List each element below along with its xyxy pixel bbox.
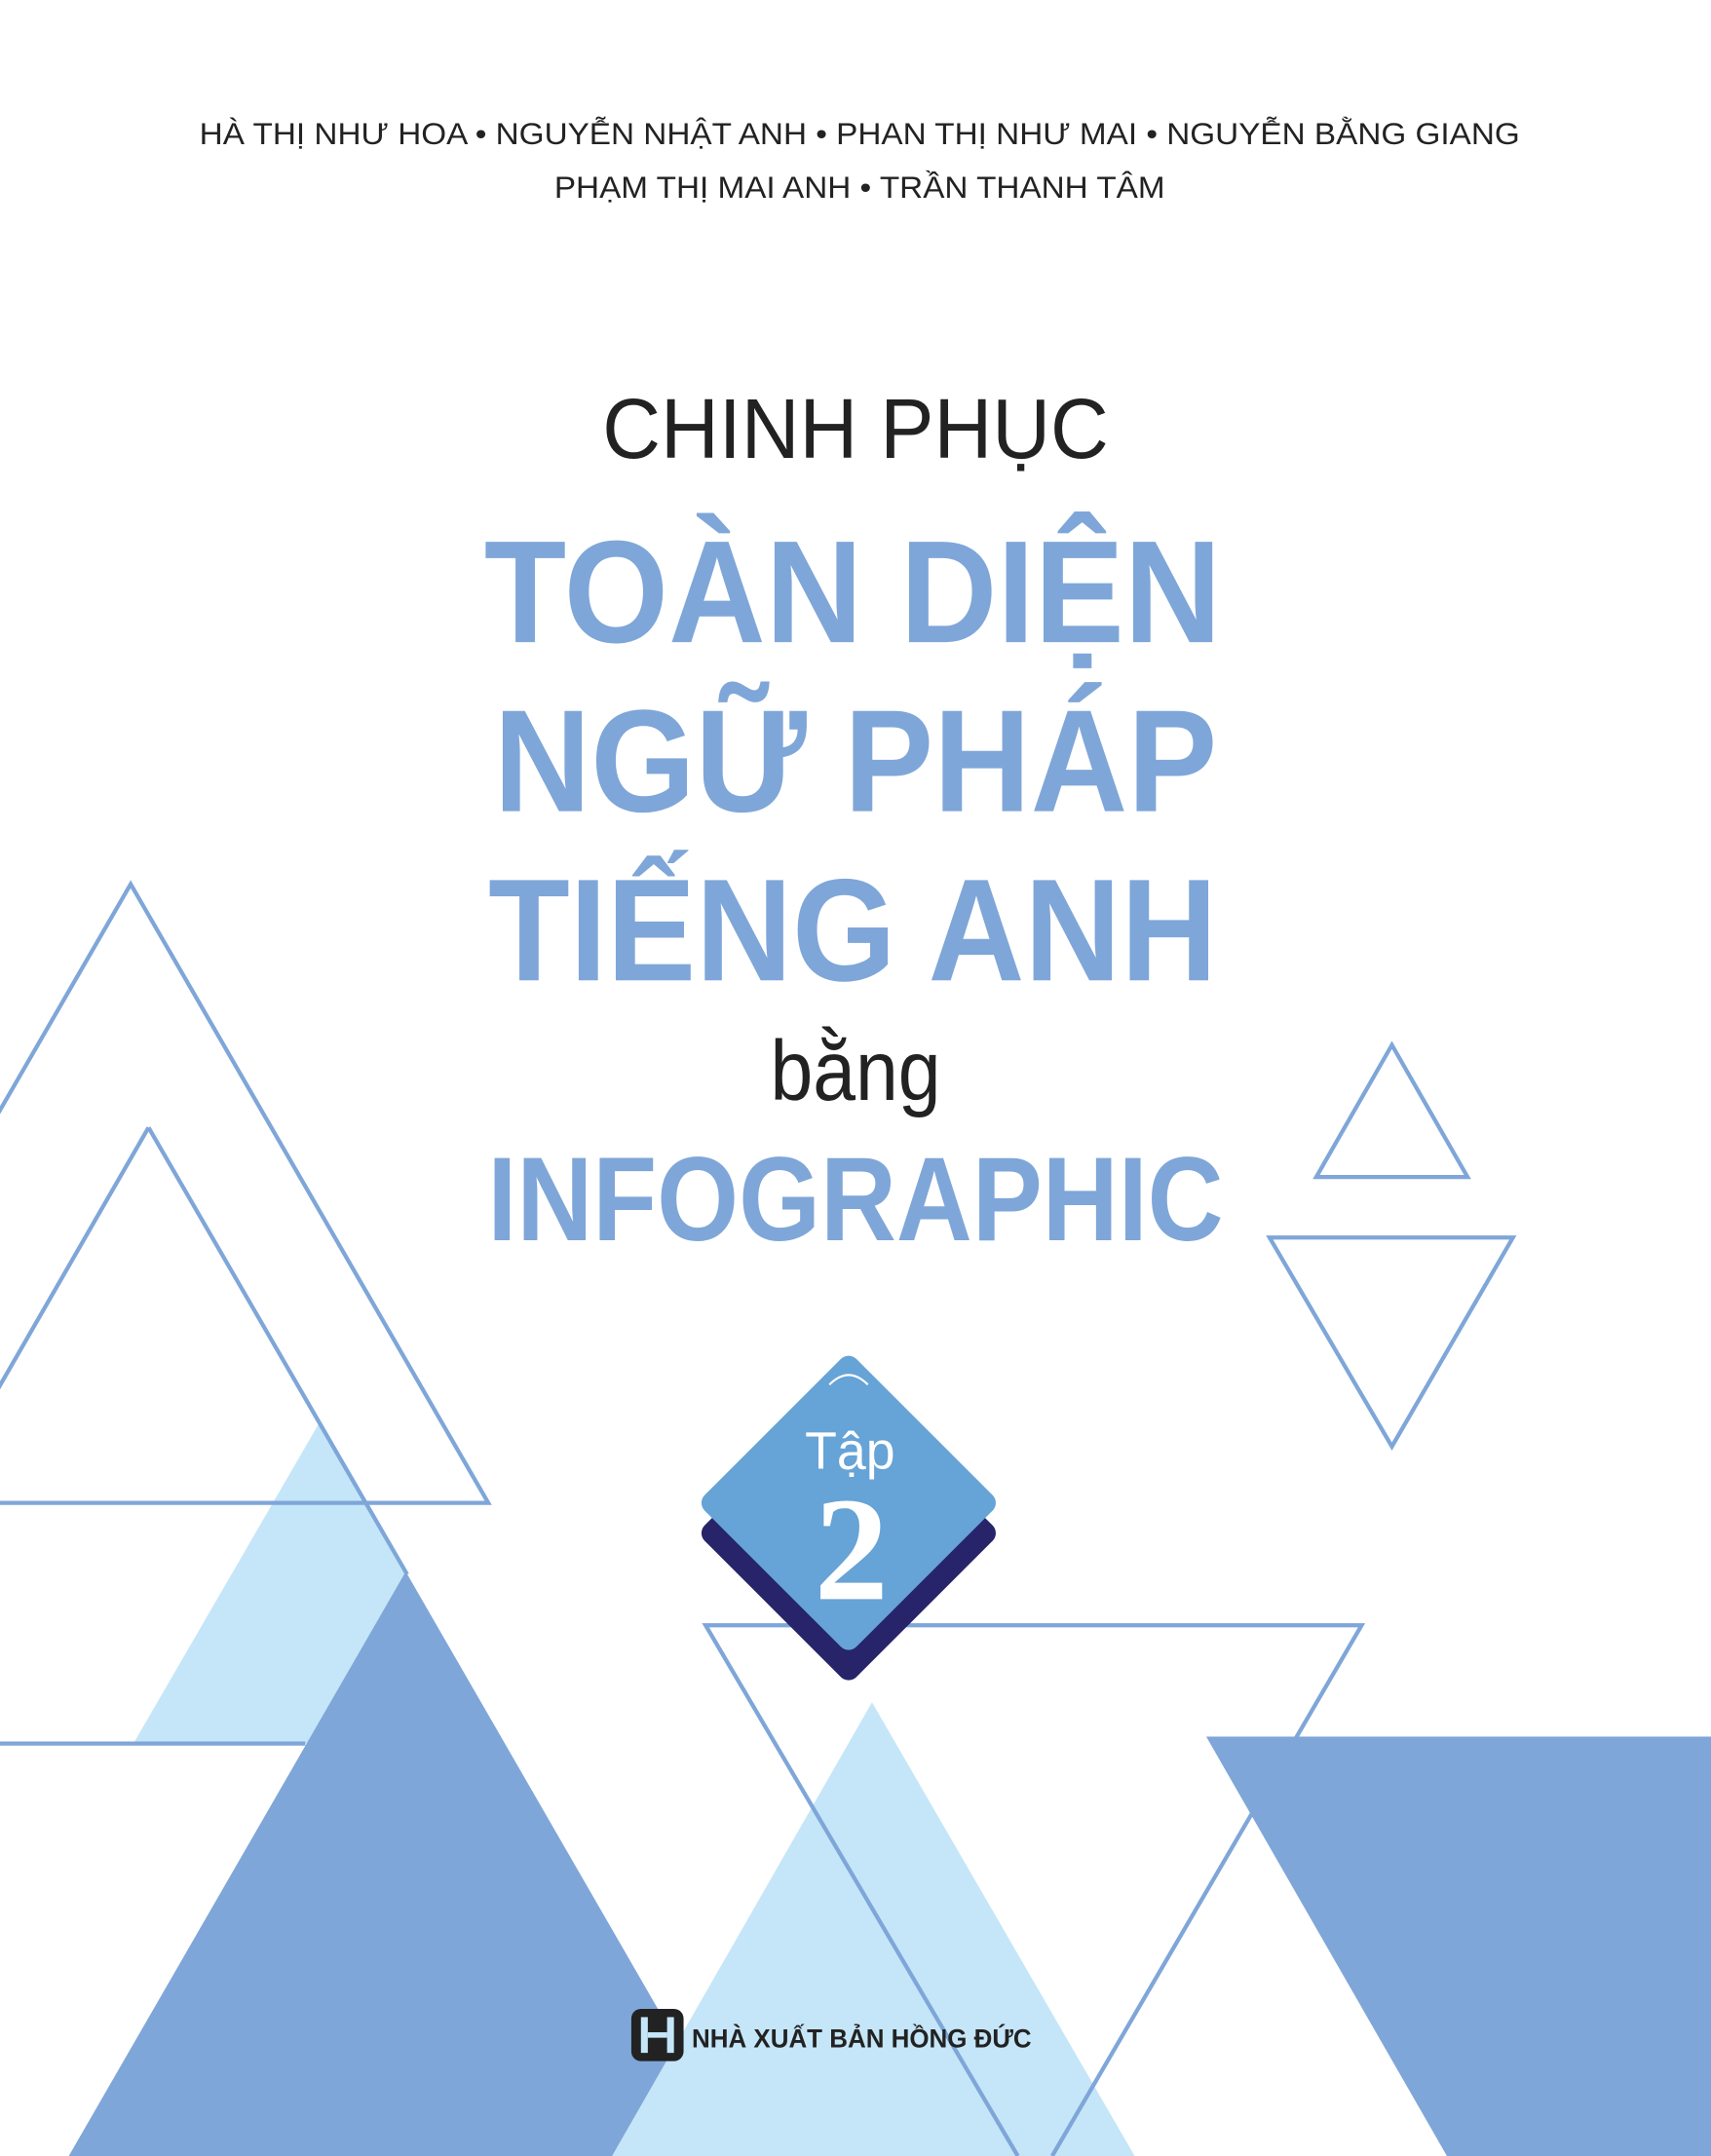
publisher logo: [631, 2009, 1032, 2061]
title: [484, 381, 1224, 1267]
authors: [200, 117, 1520, 205]
title: TOÀN DIỆN: [484, 511, 1221, 673]
title: NGỮ PHÁP: [494, 680, 1217, 843]
title: INFOGRAPHIC: [487, 1133, 1224, 1267]
dark filled triangle left: [69, 1571, 742, 2156]
authors: PHẠM THỊ MAI ANH • TRẦN THANH TÂM: [554, 170, 1165, 205]
title: CHINH PHỤC: [602, 381, 1109, 476]
light triangle bottom middle: [612, 1702, 1135, 2156]
title: TIẾNG ANH: [488, 849, 1217, 1011]
publisher logo: NHÀ XUẤT BẢN HỒNG ĐỨC: [692, 2023, 1032, 2054]
light triangle left: [133, 1423, 505, 1744]
diamond badge: Tập 2: 2: [815, 1466, 889, 1631]
outline triangles: [0, 884, 1513, 2156]
diamond badge: Tập 2: [697, 1351, 1001, 1684]
authors: HÀ THỊ NHƯ HOA • NGUYỄN NHẬT ANH • PHAN THỊ NHƯ MAI • NGUYỄN BẰNG GIANG: [200, 117, 1520, 151]
filled shape right: [1206, 1737, 1711, 2156]
diamond badge: Tập 2: Tập: [805, 1421, 895, 1480]
title: bằng: [770, 1023, 941, 1118]
